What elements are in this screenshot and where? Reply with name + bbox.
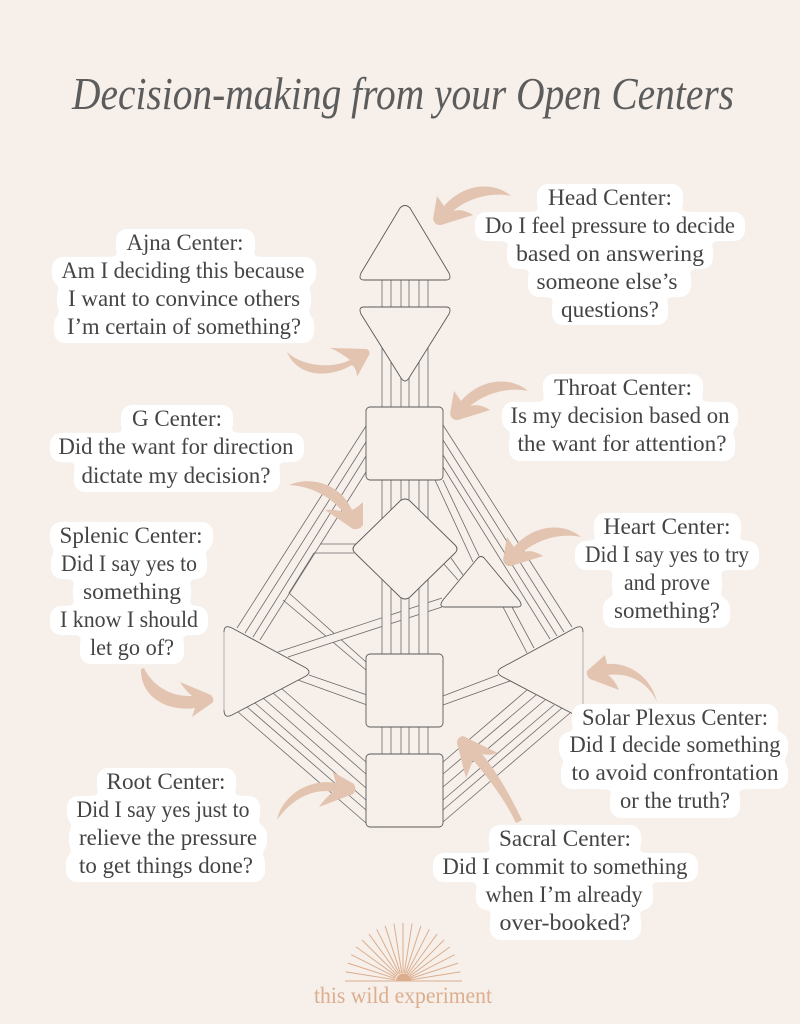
arrow: to solar plexus center [587, 655, 657, 702]
question: the want for attention? [518, 431, 726, 456]
question: Did I say yes just to [76, 797, 250, 822]
question [62, 258, 304, 339]
question: I want to convince others [68, 286, 300, 311]
question: I’m certain of something? [67, 314, 301, 339]
center: solar plexus triangle [498, 627, 583, 716]
channel: heart to spleen [278, 598, 442, 657]
label: Splenic Center [50, 522, 213, 664]
center: heart triangle [441, 556, 521, 607]
question: Did I say yes to try [585, 542, 749, 567]
question: Am I deciding this because [62, 258, 304, 283]
icon: sunburst [345, 923, 462, 981]
heading: Head Center: [548, 185, 672, 210]
question [510, 403, 730, 456]
question: to avoid confrontation [572, 760, 779, 785]
question: Did I decide something [570, 732, 781, 757]
logo: this wild experiment [314, 923, 493, 1008]
bodygraph diagram [224, 206, 583, 827]
heading: G Center: [132, 406, 222, 431]
arrow: to G center [289, 481, 363, 529]
label: Root Center [66, 768, 267, 882]
center: splenic triangle [224, 627, 309, 716]
heading: Sacral Center: [499, 826, 631, 851]
heading: Splenic Center: [60, 523, 202, 548]
question: Did I commit to something [442, 854, 688, 879]
heading: Heart Center: [604, 514, 730, 539]
question: to get things done? [79, 853, 253, 878]
question: something [83, 579, 181, 604]
heading: Solar Plexus Center: [582, 705, 768, 730]
question: and prove [624, 570, 710, 595]
arrow: to heart center [503, 528, 581, 566]
question: I know I should [60, 607, 198, 632]
channels: diagonal connections [237, 425, 572, 823]
label: Sacral Center [433, 825, 698, 940]
center: sacral square [366, 654, 443, 727]
question: something? [614, 598, 720, 623]
question: Did I say yes to [61, 551, 197, 576]
label: Ajna Center [52, 229, 316, 343]
arrow: to ajna center [287, 348, 370, 377]
center: throat square [366, 407, 443, 480]
question: over-booked? [500, 910, 630, 935]
question: questions? [561, 297, 659, 322]
arrow: to root center [277, 772, 355, 820]
channels: vertical connections [382, 280, 428, 754]
arrow: to sacral center [457, 736, 522, 823]
question [585, 542, 749, 623]
question: when I’m already [486, 882, 643, 907]
question: someone else’s [536, 269, 678, 294]
question [570, 732, 781, 813]
logo wordmark: this wild experiment [314, 983, 493, 1008]
label: G Center [50, 405, 304, 492]
center: ajna triangle [360, 307, 450, 381]
arrow: to splenic center [141, 668, 213, 717]
label: Head Center [475, 184, 745, 325]
arrow: to throat center [450, 382, 528, 420]
label: Throat Center [502, 374, 738, 461]
question: Did the want for direction [58, 434, 294, 459]
heading: Throat Center: [554, 375, 692, 400]
heading: Ajna Center: [126, 230, 244, 255]
heading: Root Center: [106, 769, 226, 794]
question: based on answering [516, 241, 705, 266]
center: G diamond [353, 499, 457, 599]
question [58, 434, 294, 488]
question: relieve the pressure [79, 825, 257, 850]
question: dictate my decision? [82, 463, 270, 488]
question: Do I feel pressure to decide [485, 213, 735, 238]
center: root square [366, 754, 443, 827]
center: head triangle [360, 206, 450, 280]
label: Solar Plexus Center [559, 704, 788, 818]
question [485, 213, 735, 322]
question [60, 551, 198, 660]
question [76, 797, 257, 878]
arrow: to head center [433, 187, 511, 225]
question: or the truth? [620, 788, 730, 813]
question [442, 854, 688, 935]
question: Is my decision based on [510, 403, 730, 428]
question: let go of? [90, 635, 174, 660]
label: Heart Center [575, 513, 759, 628]
